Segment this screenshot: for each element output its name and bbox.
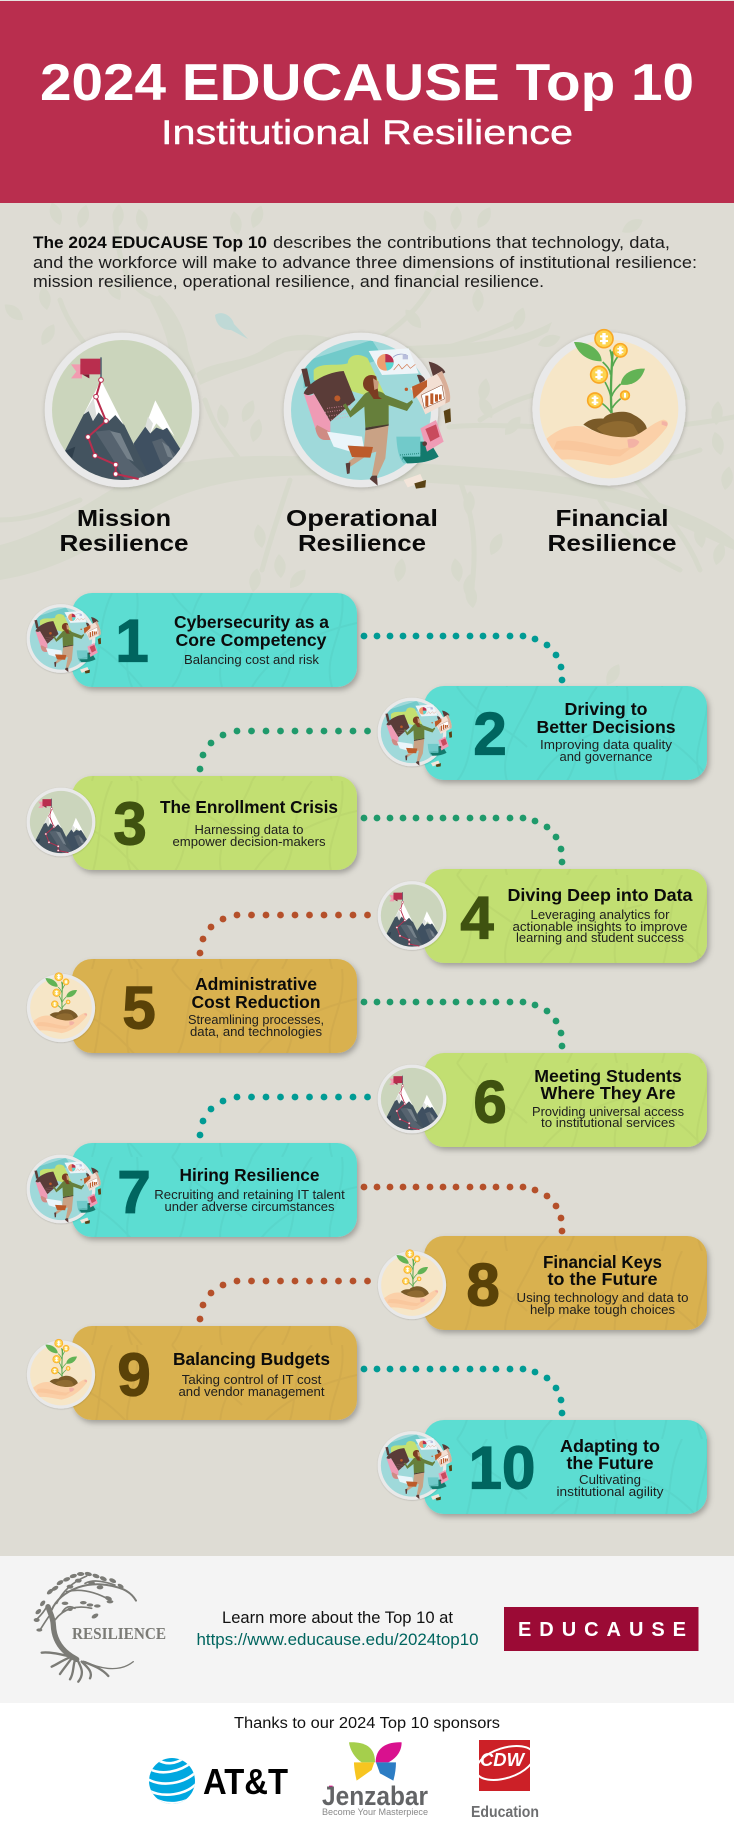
educause logo: EDUCAUSE [518,1619,686,1641]
heading: operational resilience [286,505,438,556]
number 1: 1 [115,608,149,674]
icon: financial [27,973,95,1042]
icon: operational [27,604,101,674]
icon: operational [27,1155,101,1224]
icon: mission [378,1065,446,1133]
icon: financial [378,1250,446,1319]
heading: operational resilience: Resilience [298,530,426,556]
intro paragraph: The 2024 EDUCAUSE Top 10 [33,234,267,252]
title and description: The Enrollment Crisis [160,797,338,817]
card 4 [378,869,707,963]
footer band [0,1556,734,1703]
header banner [0,0,734,203]
title and description: Driving to [564,699,648,719]
bird [215,313,248,339]
title and description: to the Future [548,1269,658,1289]
number 8: 8 [466,1252,500,1318]
connector 4 to 5 [197,912,371,956]
title and description: Better Decisions [536,717,676,737]
connector 1 to 2 [361,633,565,683]
CDW Education logo: CDW [480,1750,526,1770]
number 3: 3 [113,790,147,858]
connector 8 to 9 [197,1278,371,1322]
connector 9 to 10 [361,1366,565,1416]
icon: mission [27,788,95,856]
title and description: Financial Keys [543,1252,662,1272]
title and description [556,1436,664,1499]
title and description [532,1066,684,1130]
title and description: Improving data quality [540,738,673,752]
Jenzabar logo [322,1742,428,1818]
card 3 [27,776,357,870]
CDW Education logo [471,1739,539,1821]
heading: mission resilience: Mission [77,505,171,531]
title and description: and vendor management [178,1385,325,1399]
Jenzabar logo: Jenzabar [322,1781,428,1811]
intro paragraph: describes the contributions that technology, data, [273,234,670,252]
resilience wordmark: RESILIENCE [72,1624,166,1643]
heading: operational resilience: Operational [286,505,438,531]
title and description: Balancing Budgets [173,1349,330,1369]
title and description: Diving Deep into Data [508,885,693,905]
heading: mission resilience [60,505,188,556]
icon: financial resilience plant and coins [532,330,686,486]
title and description: the Future [566,1453,654,1473]
title and description: under adverse circumstances [164,1200,334,1214]
title and description: empower decision-makers [172,835,326,849]
heading: financial resilience [548,505,676,556]
title and description: Hiring Resilience [180,1165,320,1185]
heading: mission resilience: Resilience [60,530,188,556]
connector 3 to 4 [361,815,565,865]
title and description [154,1165,345,1214]
number 10: 10 [469,1434,535,1502]
title and description [516,1252,689,1317]
card 9 [27,1326,357,1420]
title and description: Streamlining processes, [188,1013,324,1027]
title and description: institutional agility [556,1485,664,1499]
card 10 [378,1420,707,1514]
card 1 [27,593,357,687]
icon: financial [27,1339,95,1409]
number 4: 4 [460,884,494,952]
Jenzabar logo: Become Your Masterpiece [322,1807,428,1818]
educause logo [504,1607,698,1651]
connector 6 to 7 [197,1094,371,1138]
title and description: Meeting Students [534,1066,682,1086]
CDW Education logo: Education [471,1804,539,1821]
title and description: Balancing cost and risk [184,653,320,667]
title and description: and governance [560,750,653,764]
resilience tree logo [34,1571,166,1682]
title and description [174,612,329,667]
AT&T logo: AT&T [203,1761,288,1802]
card 7 [27,1143,357,1237]
card 5 [27,959,357,1053]
icon: operational [378,1431,452,1501]
title and description [173,1349,330,1399]
number 5: 5 [122,974,156,1042]
title and description: Using technology and data to [516,1291,689,1305]
title and description: Cost Reduction [192,992,320,1012]
connector 2 to 3 [197,728,371,772]
title and description: Core Competency [176,630,327,650]
title and description: Taking control of IT cost [182,1373,322,1387]
title and description: learning and student success [516,931,684,945]
icon: operational [378,698,452,767]
title and description: Leveraging analytics for [530,908,670,922]
subtitle: Institutional Resilience [161,114,573,152]
AT&T logo [146,1758,288,1804]
connector 5 to 6 [361,999,565,1049]
card 8 [378,1236,707,1330]
icon: mission resilience mountain [45,333,199,487]
intro paragraph: and the workforce will make to advance three dimensions of institutional resilience: [33,254,697,272]
title and description [536,699,676,764]
card 6 [378,1053,707,1147]
title and description: Cybersecurity as a [174,612,329,632]
number 7: 7 [117,1158,151,1226]
title and description: Administrative [195,974,317,994]
title and description: Adapting to [560,1436,660,1456]
title and description: Recruiting and retaining IT talent [154,1188,345,1202]
sponsors section [0,1703,734,1835]
number 2: 2 [473,700,507,768]
title and description: actionable insights to improve [512,920,688,934]
icon: mission [378,881,446,950]
sponsors heading: Thanks to our 2024 Top 10 sponsors [234,1715,500,1732]
title and description: data, and technologies [190,1025,322,1039]
link: https://www.educause.edu/2024top10 [196,1631,478,1649]
heading: financial resilience: Financial [556,505,668,531]
icon: operational resilience person [284,333,451,489]
title and description: help make tough choices [530,1303,675,1317]
number 9: 9 [117,1342,151,1408]
connector 7 to 8 [361,1184,565,1234]
title and description [160,797,338,849]
learn more text: Learn more about the Top 10 at [222,1609,453,1627]
heading: financial resilience: Resilience [548,530,676,556]
title and description: Cultivating [579,1473,641,1487]
intro paragraph: mission resilience, operational resilience, and financial resilience. [33,273,544,291]
title and description [188,974,324,1039]
title: 2024 EDUCAUSE Top 10 [40,54,694,112]
title and description [508,885,693,945]
title and description: Harnessing data to [194,823,304,837]
number 6: 6 [473,1068,507,1136]
title and description: Providing universal access [532,1105,684,1119]
card 2 [378,686,707,780]
background tree illustration [0,201,734,688]
title and description: Where They Are [540,1083,676,1103]
intro paragraph [33,234,697,291]
title and description: to institutional services [541,1116,675,1130]
